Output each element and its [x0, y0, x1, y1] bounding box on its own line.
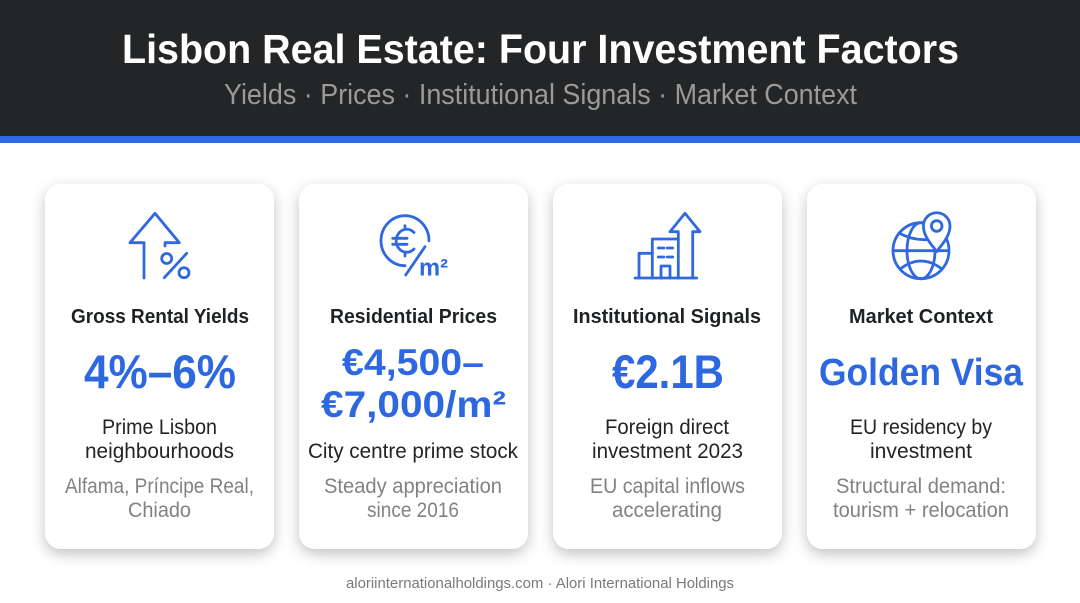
heading: Institutional Signals — [573, 305, 761, 328]
footer: aloriinternationalholdings.com · Alori International Holdings — [346, 576, 734, 592]
description: investment — [870, 440, 972, 463]
value: Golden Visa — [819, 352, 1024, 394]
description: Foreign direct — [605, 416, 729, 439]
header band — [0, 0, 1080, 143]
description — [85, 416, 234, 463]
description — [592, 416, 743, 463]
icon: globe with location pin — [893, 213, 950, 279]
heading: Market Context — [849, 305, 993, 328]
value: €2.1B — [612, 345, 724, 398]
icon: buildings with rising arrow — [635, 213, 700, 278]
panel: gross rental yields — [45, 184, 274, 549]
description: investment 2023 — [592, 440, 743, 463]
panel: institutional signals — [553, 184, 782, 549]
description: Prime Lisbon — [102, 416, 217, 439]
value: 4%–6% — [84, 345, 236, 398]
subtitle: Yields · Prices · Institutional Signals · Market Context — [224, 79, 857, 111]
detail: Alfama, Príncipe Real, — [65, 475, 254, 498]
panel: residential prices — [299, 184, 528, 549]
value: €4,500– — [342, 342, 484, 383]
detail: since 2016 — [367, 499, 459, 522]
detail — [833, 475, 1009, 522]
icon: euro per square metre: m² — [419, 254, 448, 282]
detail: Chiado — [128, 499, 191, 522]
detail: Structural demand: — [836, 475, 1006, 498]
value: €7,000/m² — [321, 384, 506, 425]
detail — [590, 475, 745, 522]
icon: euro per square metre — [381, 216, 448, 282]
detail — [65, 475, 254, 522]
description: City centre prime stock — [308, 440, 518, 463]
title: Lisbon Real Estate: Four Investment Factors — [122, 26, 959, 72]
detail: tourism + relocation — [833, 499, 1009, 522]
detail — [324, 475, 502, 522]
value — [321, 342, 506, 425]
description: EU residency by — [850, 416, 992, 439]
heading: Residential Prices — [330, 305, 497, 328]
detail: EU capital inflows — [590, 475, 745, 498]
detail: accelerating — [612, 499, 722, 522]
detail: Steady appreciation — [324, 475, 502, 498]
description: neighbourhoods — [85, 440, 234, 463]
icon: up arrow with percent — [130, 213, 189, 278]
heading: Gross Rental Yields — [71, 305, 249, 328]
description — [850, 416, 992, 463]
panel: market context — [807, 184, 1036, 549]
